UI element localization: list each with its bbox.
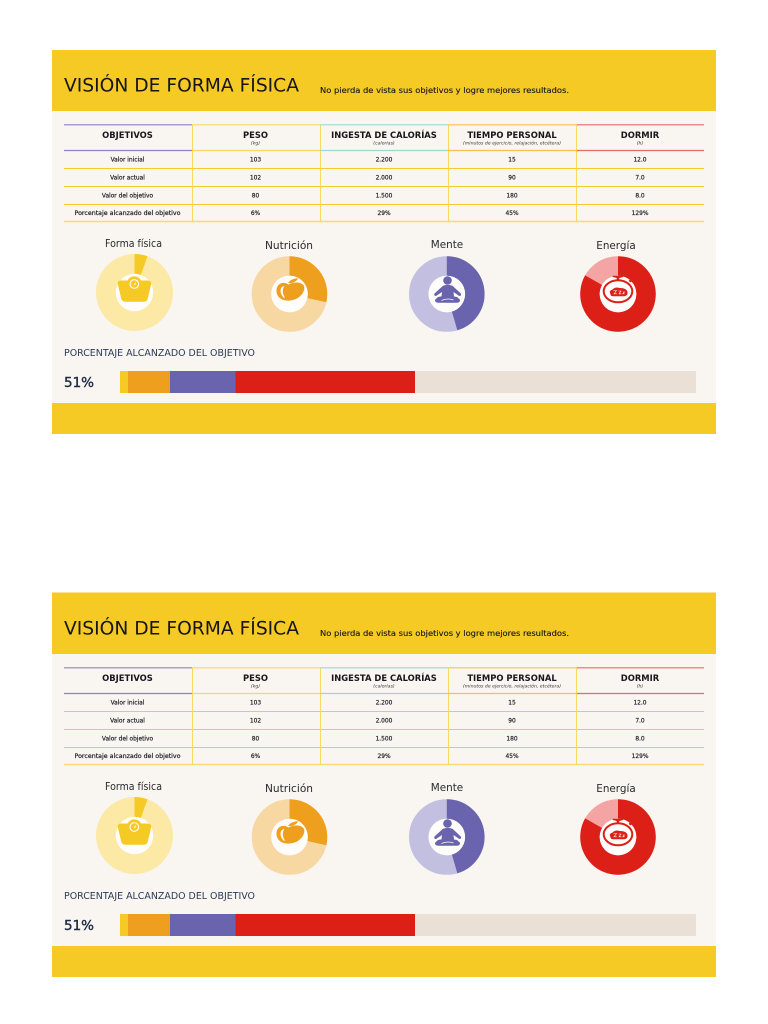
row: porcentaje alcanzado: Porcentaje alcanzado del objetivo bbox=[74, 754, 181, 760]
progress bar bbox=[120, 914, 696, 936]
row: valor actual: 7.0 bbox=[635, 175, 645, 181]
row: valor inicial bbox=[111, 157, 647, 163]
table headers: OBJETIVOS bbox=[102, 673, 153, 683]
row: valor actual: 2.000 bbox=[376, 175, 393, 181]
row: valor del objetivo bbox=[102, 193, 645, 199]
title: VISIÓN DE FORMA FÍSICA bbox=[64, 616, 299, 640]
table bbox=[64, 125, 704, 222]
table headers: (h) bbox=[637, 140, 643, 146]
subtitle: No pierda de vista sus objetivos y logre mejores resultados. bbox=[320, 629, 569, 638]
row: porcentaje alcanzado: 45% bbox=[505, 211, 519, 217]
subtitle: No pierda de vista sus objetivos y logre mejores resultados. bbox=[320, 86, 569, 95]
table headers: (minutos de ejercicio, relajación, etcétera) bbox=[463, 682, 561, 690]
row: valor actual: Valor actual bbox=[110, 175, 145, 181]
row: valor inicial: 2.200 bbox=[376, 157, 393, 163]
table headers: (kg) bbox=[251, 140, 260, 146]
donut: forma física bbox=[105, 238, 163, 321]
header band bbox=[52, 592, 716, 654]
row: valor actual bbox=[110, 718, 645, 724]
row: valor inicial: 2.200 bbox=[376, 700, 393, 706]
row: valor actual: Valor actual bbox=[110, 718, 145, 724]
icon: apple bbox=[276, 821, 304, 844]
panel: fitness vision top bbox=[52, 50, 716, 434]
row: valor inicial: Valor inicial bbox=[111, 700, 145, 706]
row: porcentaje alcanzado: 129% bbox=[632, 211, 649, 217]
icon: meditating person bbox=[434, 276, 461, 303]
row: valor del objetivo: 1.500 bbox=[376, 736, 393, 742]
icon: scale bbox=[118, 819, 151, 845]
row: valor actual: 7.0 bbox=[635, 718, 645, 724]
row: valor del objetivo: 180 bbox=[506, 736, 518, 742]
row: valor actual: 2.000 bbox=[376, 718, 393, 724]
table headers: (minutos de ejercicio, relajación, etcétera) bbox=[463, 140, 561, 146]
label: Mente bbox=[431, 239, 463, 251]
row: valor actual: 90 bbox=[508, 718, 516, 724]
table headers: DORMIR bbox=[621, 673, 660, 683]
row: valor actual: 102 bbox=[250, 175, 261, 181]
donut: mente bbox=[419, 239, 475, 322]
row: porcentaje alcanzado: Porcentaje alcanzado del objetivo bbox=[74, 211, 181, 217]
table headers: TIEMPO PERSONAL bbox=[467, 130, 557, 140]
label: Forma física bbox=[105, 238, 162, 250]
row: valor del objetivo: Valor del objetivo bbox=[102, 736, 154, 742]
table headers: (calorías) bbox=[373, 682, 395, 690]
row: valor inicial: 15 bbox=[508, 700, 516, 706]
row: valor del objetivo: 8.0 bbox=[635, 736, 645, 742]
table headers: INGESTA DE CALORÍAS bbox=[331, 129, 437, 140]
row: porcentaje alcanzado: 29% bbox=[377, 754, 391, 760]
row: valor inicial bbox=[111, 700, 647, 706]
label: Energía bbox=[596, 240, 636, 252]
table headers: OBJETIVOS bbox=[102, 130, 153, 140]
label: Forma física bbox=[105, 781, 162, 793]
icon: meditating person bbox=[434, 819, 461, 846]
row: valor inicial: Valor inicial bbox=[111, 157, 145, 163]
row: valor inicial: 103 bbox=[250, 700, 261, 706]
row: porcentaje alcanzado: 45% bbox=[505, 754, 519, 760]
table headers: INGESTA DE CALORÍAS bbox=[331, 672, 437, 683]
icon: stopwatch bbox=[604, 819, 632, 845]
table bbox=[64, 668, 704, 765]
label: Mente bbox=[431, 782, 463, 794]
footer band bbox=[52, 403, 716, 434]
row: porcentaje alcanzado bbox=[74, 754, 649, 760]
table headers: (kg) bbox=[251, 684, 260, 690]
row: valor inicial: 103 bbox=[250, 157, 261, 163]
icon: stopwatch bbox=[604, 276, 632, 302]
row: porcentaje alcanzado: 6% bbox=[251, 211, 261, 217]
row: valor del objetivo: Valor del objetivo bbox=[102, 193, 154, 199]
row: valor inicial: 12.0 bbox=[633, 157, 647, 163]
row: valor del objetivo: 1.500 bbox=[376, 193, 393, 199]
panel background bbox=[52, 50, 716, 434]
row: valor del objetivo: 180 bbox=[506, 193, 518, 199]
donut: mente bbox=[419, 782, 475, 865]
table headers bbox=[102, 672, 660, 690]
table headers: (h) bbox=[637, 684, 643, 690]
table headers: DORMIR bbox=[621, 130, 660, 140]
progress heading: PORCENTAJE ALCANZADO DEL OBJETIVO bbox=[64, 891, 255, 902]
donut: energía bbox=[590, 783, 646, 865]
panel: fitness vision bottom bbox=[52, 592, 716, 977]
donut: nutrición bbox=[262, 240, 318, 322]
row: valor del objetivo bbox=[102, 736, 645, 742]
donut: nutrición bbox=[262, 783, 318, 865]
table headers: PESO bbox=[243, 673, 268, 683]
table headers: PESO bbox=[243, 130, 268, 140]
row: porcentaje alcanzado: 6% bbox=[251, 754, 261, 760]
row: valor del objetivo: 8.0 bbox=[635, 193, 645, 199]
progress bar bbox=[120, 371, 696, 393]
row: valor actual: 90 bbox=[508, 175, 516, 181]
table headers bbox=[102, 129, 660, 146]
row: porcentaje alcanzado: 129% bbox=[632, 754, 649, 760]
row: valor actual: 102 bbox=[250, 718, 261, 724]
row: valor del objetivo: 80 bbox=[252, 193, 259, 199]
donut: energía bbox=[590, 240, 646, 322]
row: valor actual bbox=[110, 175, 645, 181]
icon: scale bbox=[118, 276, 151, 302]
footer band bbox=[52, 946, 716, 977]
label: Energía bbox=[596, 783, 636, 795]
panel background bbox=[52, 593, 716, 977]
table headers: (calorías) bbox=[373, 140, 395, 146]
label: Nutrición bbox=[265, 240, 313, 252]
overall percentage: 51% bbox=[64, 375, 94, 391]
icon: apple bbox=[276, 278, 304, 301]
donut: forma física bbox=[105, 781, 163, 864]
row: porcentaje alcanzado bbox=[74, 211, 649, 217]
title: VISIÓN DE FORMA FÍSICA bbox=[64, 72, 299, 96]
row: valor inicial: 12.0 bbox=[633, 700, 647, 706]
overall percentage: 51% bbox=[64, 918, 94, 934]
row: porcentaje alcanzado: 29% bbox=[377, 211, 391, 217]
table headers: TIEMPO PERSONAL bbox=[467, 673, 557, 683]
row: valor del objetivo: 80 bbox=[252, 736, 259, 742]
progress heading: PORCENTAJE ALCANZADO DEL OBJETIVO bbox=[64, 348, 255, 359]
label: Nutrición bbox=[265, 783, 313, 795]
header band bbox=[52, 50, 716, 111]
row: valor inicial: 15 bbox=[508, 157, 516, 163]
